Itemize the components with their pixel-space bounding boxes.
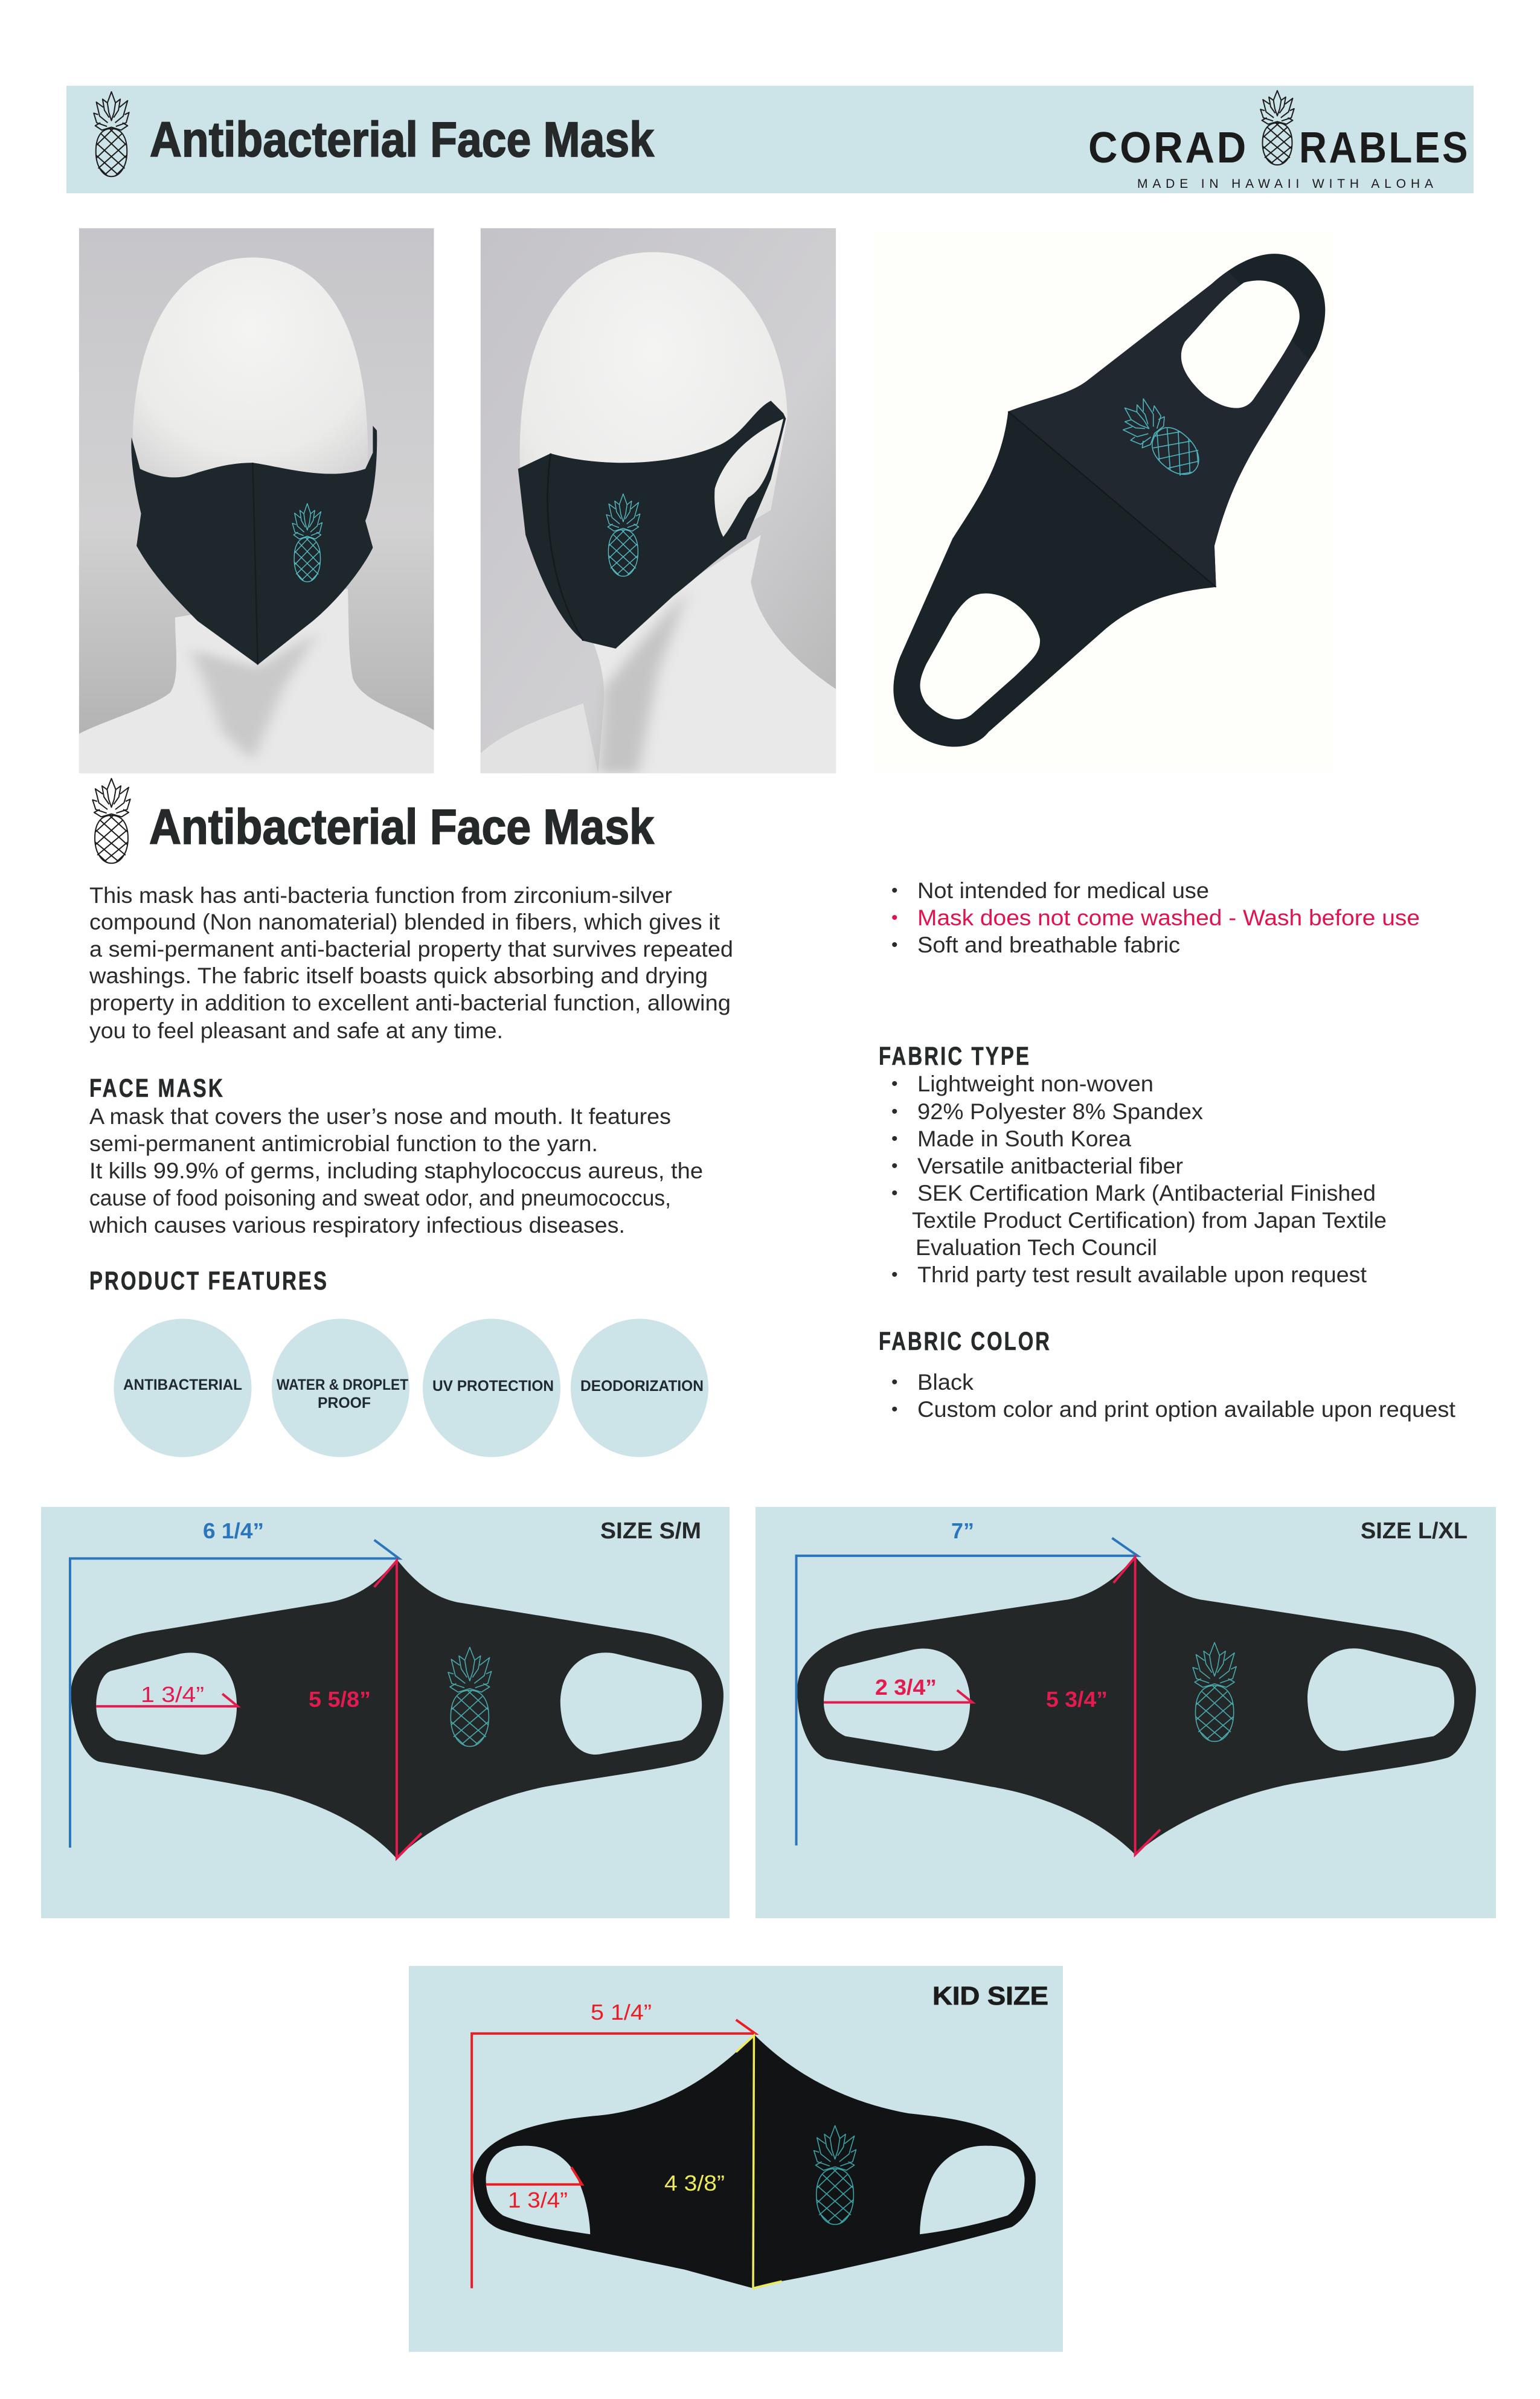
brand logo: MADE IN HAWAII WITH ALOHA bbox=[1137, 177, 1433, 191]
intro paragraph bbox=[89, 883, 733, 1043]
notes list: • bbox=[891, 908, 898, 928]
fabric type list: 92% Polyester 8% Spandex bbox=[917, 1099, 1204, 1124]
photo: three-quarter view bbox=[481, 228, 836, 773]
photo: mask laid flat bbox=[893, 254, 1325, 747]
label: height 4 3/8: 4 3/8” bbox=[664, 2171, 725, 2195]
badge: deodorization: DEODORIZATION bbox=[580, 1378, 704, 1395]
fabric color list: • bbox=[891, 1372, 898, 1392]
label: width 7: 7” bbox=[951, 1518, 974, 1543]
photo: mannequin front view and three-quarter view bbox=[79, 228, 836, 773]
label: hole 1 3/4: 1 3/4” bbox=[141, 1682, 204, 1707]
label: hole 2 3/4: 2 3/4” bbox=[875, 1675, 937, 1700]
icon: heading pineapple bbox=[92, 779, 130, 863]
panel: size L/XL bbox=[756, 1507, 1496, 1918]
fabric type list: Evaluation Tech Council bbox=[916, 1235, 1157, 1260]
badge: deodorization bbox=[571, 1319, 708, 1457]
intro paragraph: compound (Non nanomaterial) blended in fibers, which gives it bbox=[89, 910, 720, 934]
mask diagram S/M bbox=[70, 1540, 723, 1859]
fabric type list: • bbox=[891, 1129, 898, 1149]
notes list: Mask does not come washed - Wash before use bbox=[917, 905, 1420, 930]
face mask description: semi-permanent antimicrobial function to the yarn. bbox=[89, 1131, 598, 1156]
header banner bbox=[66, 86, 1474, 193]
fabric type section bbox=[879, 1042, 1387, 1287]
intro paragraph: property in addition to excellent anti-bacterial function, allowing bbox=[89, 991, 731, 1015]
mask diagram L/XL bbox=[797, 1538, 1476, 1855]
fabric color section bbox=[879, 1327, 1456, 1422]
badge: uv protection bbox=[423, 1319, 560, 1457]
face mask description: which causes various respiratory infectious diseases. bbox=[89, 1213, 625, 1238]
section heading bbox=[92, 779, 654, 863]
badge: water and droplet proof bbox=[272, 1319, 409, 1457]
brand logo bbox=[1088, 91, 1470, 191]
badge: uv protection: UV PROTECTION bbox=[432, 1378, 554, 1395]
intro paragraph: a semi-permanent anti-bacterial property that survives repeated bbox=[89, 937, 733, 962]
mask diagram kid bbox=[472, 2020, 1036, 2288]
fabric type list: Made in South Korea bbox=[917, 1126, 1131, 1151]
badge: antibacterial: ANTIBACTERIAL bbox=[123, 1376, 242, 1393]
face mask description: A mask that covers the user’s nose and mouth. It features bbox=[89, 1104, 671, 1129]
fabric color list: Black bbox=[917, 1370, 974, 1395]
heading: product features: PRODUCT FEATURES bbox=[89, 1267, 329, 1296]
label: width 5 1/4: 5 1/4” bbox=[591, 2000, 652, 2025]
section title: Antibacterial Face Mask bbox=[149, 800, 654, 855]
brand logo: RABLES bbox=[1299, 124, 1470, 172]
notes list bbox=[891, 878, 1420, 957]
photo: front view bbox=[79, 228, 434, 773]
badge: water and droplet proof: PROOF bbox=[318, 1395, 371, 1411]
fabric type list: SEK Certification Mark (Antibacterial Finished bbox=[917, 1181, 1376, 1206]
notes list: • bbox=[891, 935, 898, 955]
label: size L/XL: SIZE L/XL bbox=[1361, 1518, 1468, 1544]
panel: kid size bbox=[409, 1966, 1063, 2352]
heading: face mask: FACE MASK bbox=[89, 1074, 225, 1103]
notes list: Soft and breathable fabric bbox=[917, 933, 1180, 957]
fabric type list: Thrid party test result available upon request bbox=[917, 1262, 1367, 1287]
label: size S/M: SIZE S/M bbox=[600, 1518, 701, 1544]
fabric type list: • bbox=[891, 1156, 898, 1176]
face mask description: cause of food poisoning and sweat odor, and pneumococcus, bbox=[89, 1186, 671, 1210]
label: hole 1 3/4: 1 3/4” bbox=[508, 2188, 568, 2212]
fabric type list: • bbox=[891, 1183, 898, 1203]
fabric color list: Custom color and print option available upon request bbox=[917, 1397, 1456, 1422]
icon: header pineapple bbox=[94, 92, 129, 176]
fabric type list: • bbox=[891, 1074, 898, 1094]
label: width 6 1/4: 6 1/4” bbox=[203, 1518, 264, 1543]
fabric color list: • bbox=[891, 1399, 898, 1419]
heading: fabric type: FABRIC TYPE bbox=[879, 1042, 1031, 1071]
brand logo: CORAD bbox=[1088, 124, 1248, 172]
label: kid size: KID SIZE bbox=[932, 1982, 1048, 2011]
badge: antibacterial bbox=[114, 1319, 251, 1457]
intro paragraph: you to feel pleasant and safe at any time. bbox=[89, 1018, 503, 1043]
face mask description: It kills 99.9% of germs, including staphylococcus aureus, the bbox=[89, 1158, 703, 1183]
fabric color list bbox=[891, 1370, 1456, 1422]
face mask description bbox=[89, 1104, 703, 1238]
fabric type list: Lightweight non-woven bbox=[917, 1071, 1153, 1096]
fabric type list: • bbox=[891, 1102, 898, 1122]
heading: fabric color: FABRIC COLOR bbox=[879, 1327, 1051, 1356]
label: height 5 5/8: 5 5/8” bbox=[309, 1687, 371, 1712]
notes list: • bbox=[891, 881, 898, 901]
fabric type list: Textile Product Certification) from Japan Textile bbox=[912, 1208, 1387, 1233]
fabric type list: Versatile anitbacterial fiber bbox=[917, 1154, 1183, 1178]
badge: water and droplet proof: WATER & DROPLET bbox=[277, 1376, 408, 1393]
notes list: Not intended for medical use bbox=[917, 878, 1209, 903]
intro paragraph: This mask has anti-bacteria function from zirconium-silver bbox=[89, 883, 672, 908]
header title: Antibacterial Face Mask bbox=[150, 112, 654, 167]
face mask section bbox=[89, 1074, 703, 1238]
fabric type list bbox=[891, 1071, 1387, 1287]
fabric type list: • bbox=[891, 1265, 898, 1285]
product features bbox=[89, 1267, 708, 1457]
panel: size S/M bbox=[41, 1507, 730, 1918]
label: height 5 3/4: 5 3/4” bbox=[1046, 1687, 1108, 1712]
intro paragraph: washings. The fabric itself boasts quick absorbing and drying bbox=[89, 963, 708, 988]
